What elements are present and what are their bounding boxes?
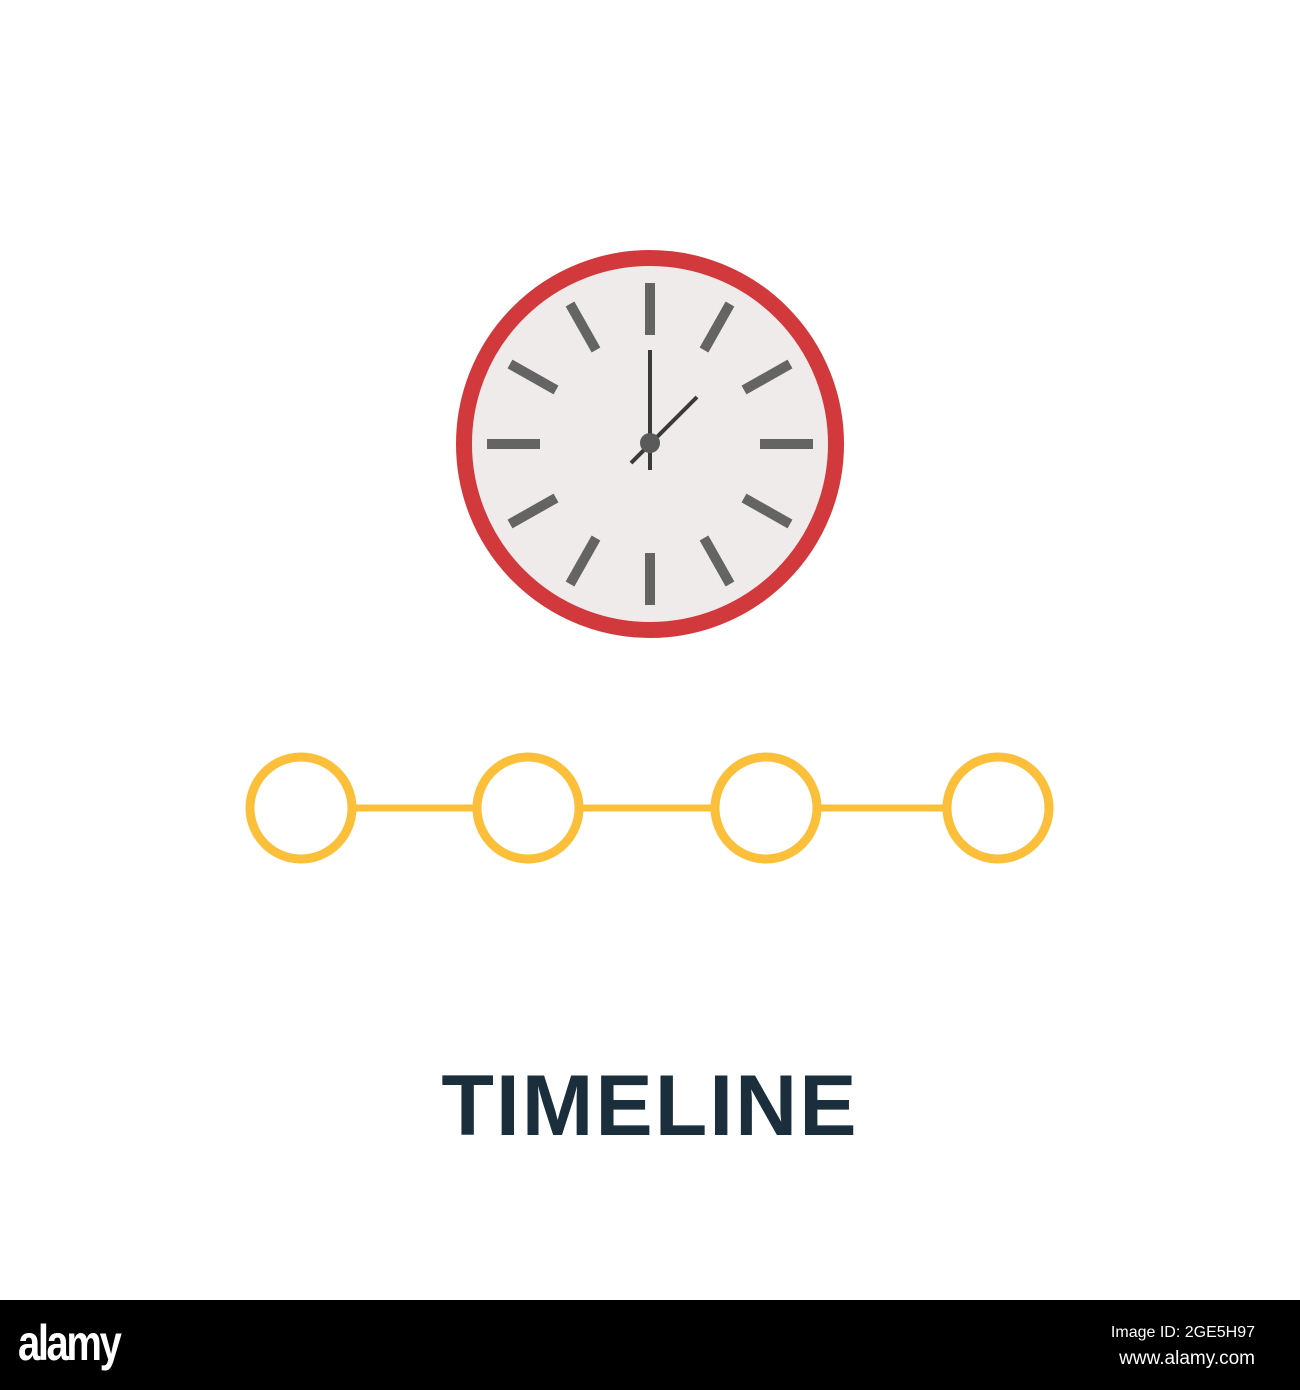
image id text: Image ID: 2GE5H97 — [1111, 1324, 1255, 1341]
footer bar — [0, 1300, 1300, 1390]
timeline: four circles connected — [246, 752, 1054, 864]
title: TIMELINE — [441, 1058, 859, 1154]
image id text — [1111, 1324, 1255, 1369]
image id text: www.alamy.com — [1119, 1348, 1255, 1369]
logo: alamy: alamy — [18, 1315, 119, 1371]
